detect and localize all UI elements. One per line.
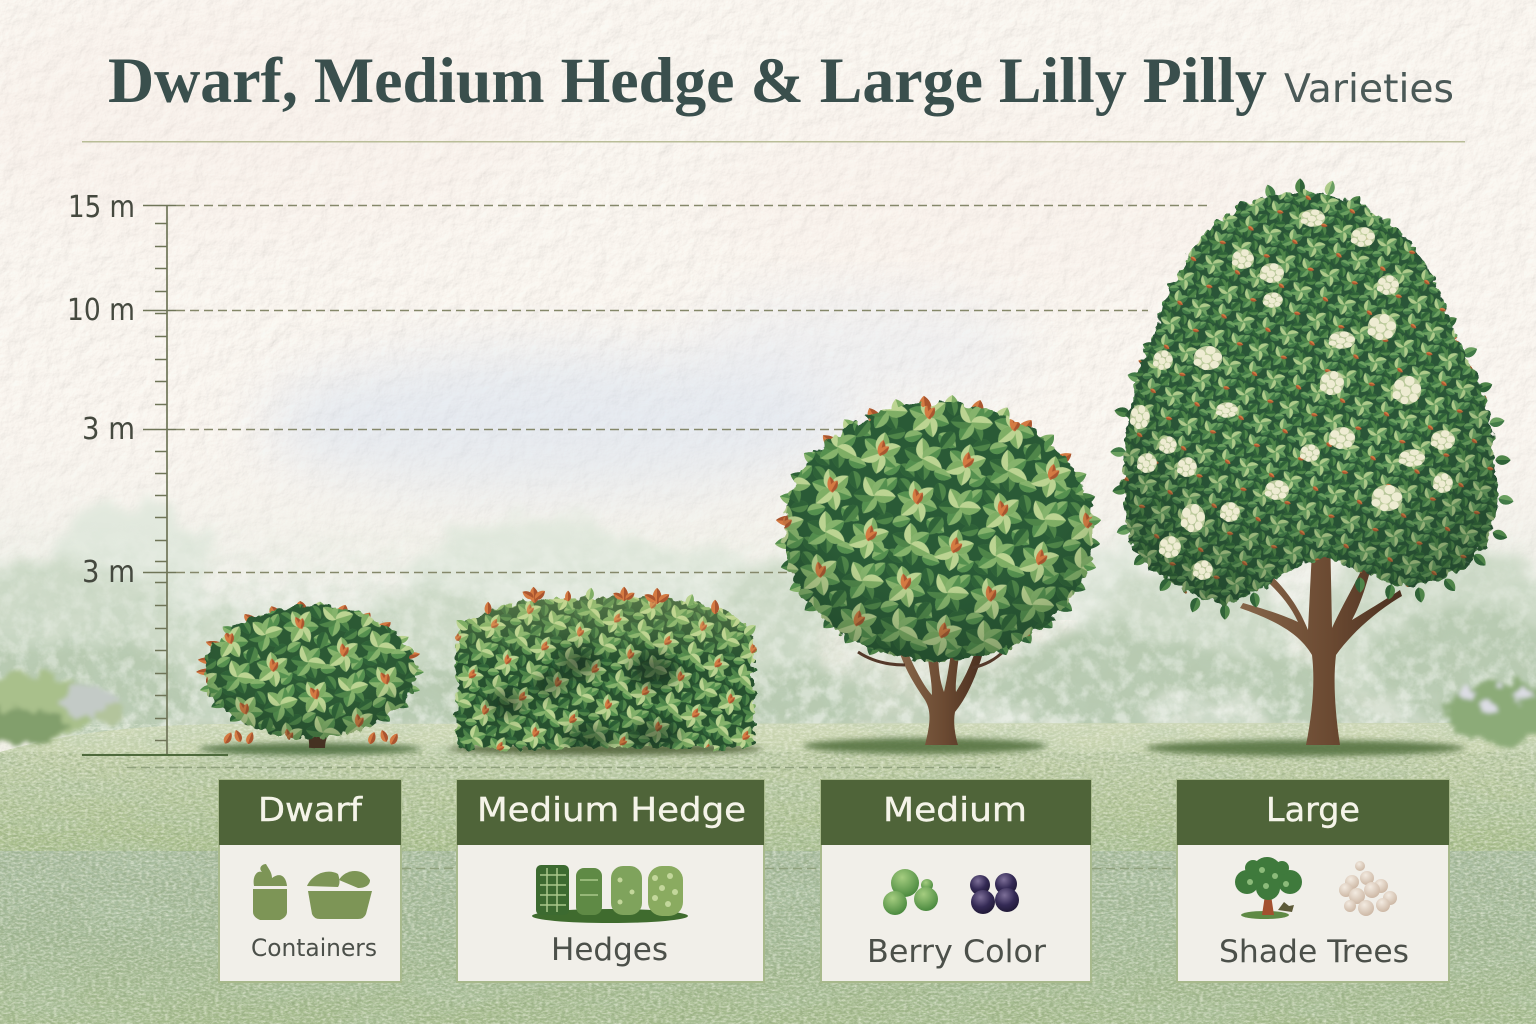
axis label 3 m lower: 3 m — [82, 555, 135, 590]
panel: large — [1177, 780, 1449, 982]
foreground bushes at edges — [0, 674, 1536, 744]
heading: dwarf: Dwarf — [258, 790, 363, 829]
axis label 3 m upper: 3 m — [82, 412, 135, 447]
icon: pale berries — [1339, 861, 1397, 916]
heading: medium: Medium — [883, 790, 1027, 829]
panel: medium — [821, 780, 1091, 982]
medium tree — [765, 385, 1115, 754]
flower clusters — [1130, 209, 1455, 580]
icon: hedges — [532, 865, 688, 923]
title: Varieties — [1284, 67, 1454, 112]
axis label 10 m: 10 m — [67, 293, 135, 328]
heading: large: Large — [1266, 790, 1360, 829]
title: Dwarf, Medium Hedge & Large Lilly Pilly — [108, 45, 1267, 117]
icon: purple berries — [970, 873, 1019, 914]
axis label 15 m: 15 m — [68, 190, 135, 225]
lawn — [0, 723, 1536, 1024]
medium tree edge leaves — [774, 394, 1102, 658]
height axis — [67, 190, 1210, 868]
icon: shade tree — [1235, 857, 1302, 919]
label: hedges: Hedges — [551, 932, 668, 968]
label: berry color: Berry Color — [867, 934, 1046, 970]
dwarf shrub — [190, 595, 430, 755]
label: shade trees: Shade Trees — [1219, 934, 1409, 970]
large tree — [1105, 175, 1515, 756]
panel: dwarf — [219, 780, 401, 982]
medium hedge — [445, 585, 765, 755]
label: containers: Containers — [251, 934, 377, 962]
background tree line — [0, 500, 1536, 735]
heading: medium hedge: Medium Hedge — [477, 790, 746, 829]
panel: medium hedge — [457, 780, 764, 982]
icon: containers — [253, 864, 372, 920]
icon: green berries — [883, 869, 938, 915]
hedge top tips — [454, 587, 758, 638]
large tree edge leaves — [1110, 178, 1514, 620]
